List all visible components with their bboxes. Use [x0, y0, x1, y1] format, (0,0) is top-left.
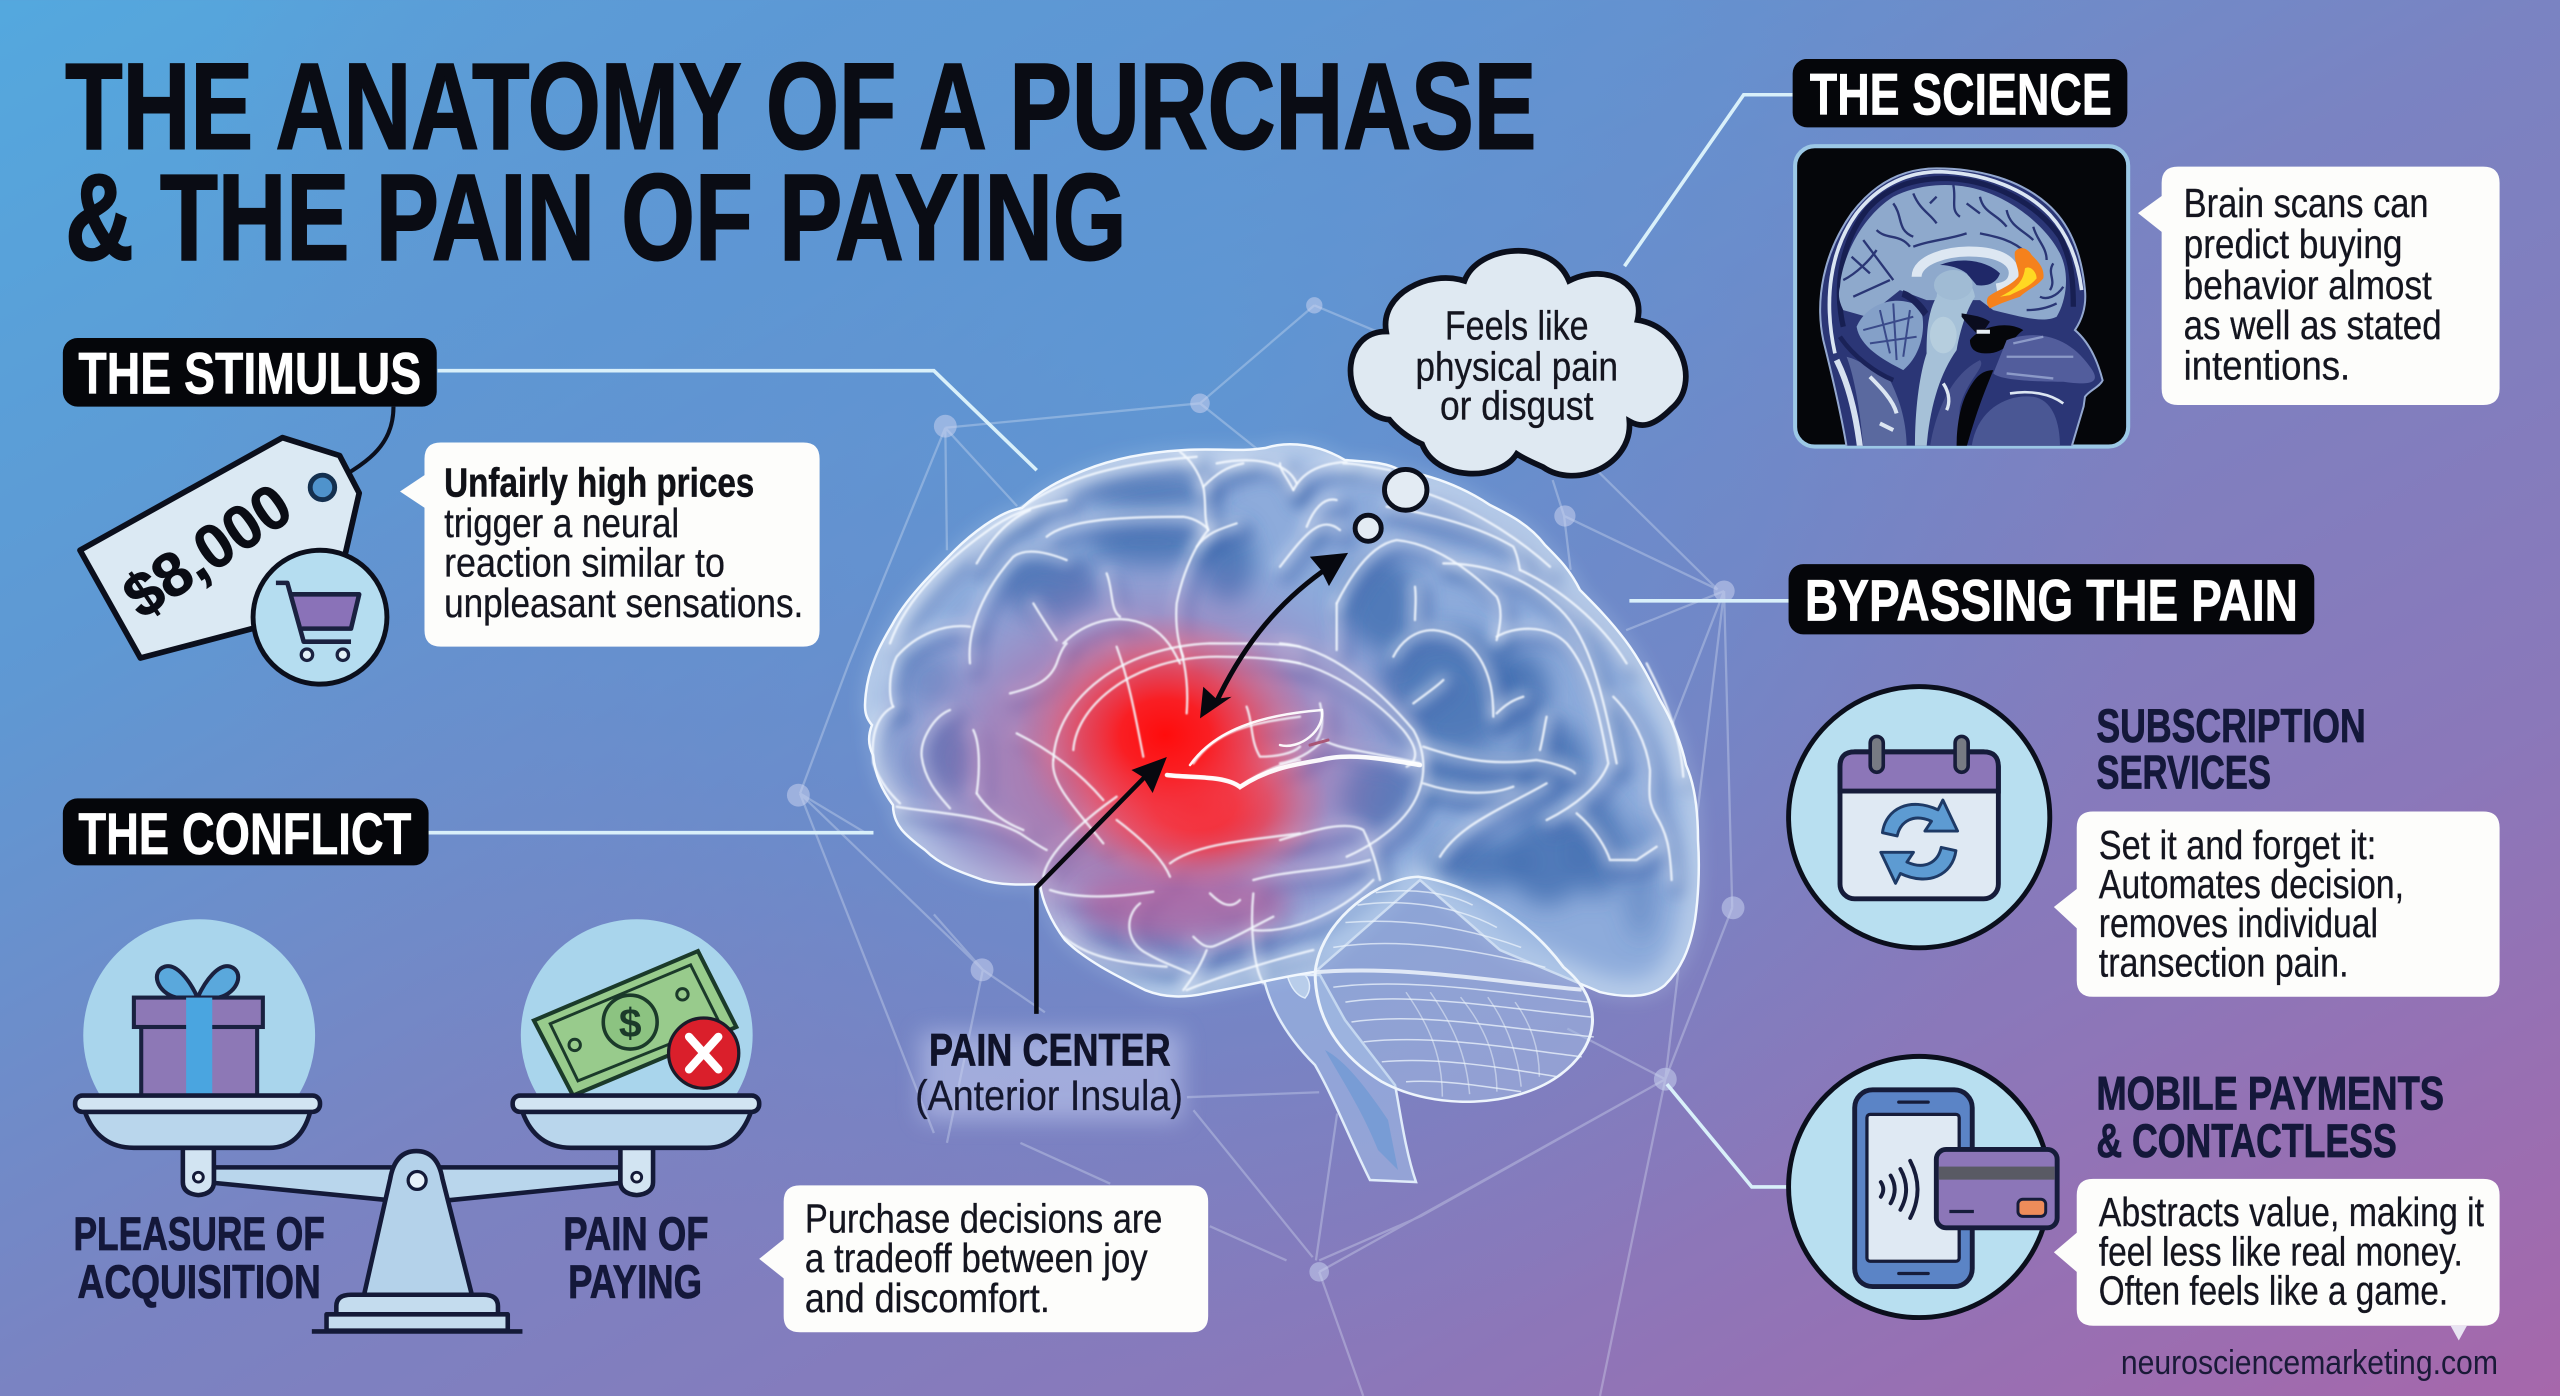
heading: the conflict: THE CONFLICT [78, 802, 412, 867]
connector lines [428, 95, 1793, 1187]
callout: mobile payment text: Often feels like a game. [2099, 1268, 2448, 1314]
callout: subscription text: Automates decision, [2099, 861, 2404, 907]
callout: subscription text: transection pain. [2099, 939, 2349, 985]
label: pleasure of acquisition: PLEASURE OF [73, 1208, 325, 1261]
heading: the stimulus: THE STIMULUS [78, 342, 421, 407]
sylvian fissure highlight [1167, 710, 1420, 787]
footer: source url: neurosciencemarketing.com [2121, 1344, 2498, 1382]
cerebellum [1315, 877, 1594, 1102]
panel: bypassing the pain [1789, 564, 2500, 1340]
brain stem [1263, 975, 1416, 1182]
icon: price tag [80, 407, 393, 658]
icon: money with cross on right pan [520, 919, 753, 1094]
label: pain center [915, 1024, 1183, 1120]
callout: conflict text: and discomfort. [805, 1275, 1050, 1321]
brain outer glow [865, 444, 1699, 996]
icon: subscription calendar [1789, 687, 2050, 948]
callout: conflict text: a tradeoff between joy [805, 1235, 1148, 1281]
image: MRI brain scan [1795, 146, 2128, 447]
icon: phone and contactless card [1789, 1056, 2057, 1318]
callout: stimulus text: Unfairly high prices [444, 459, 754, 505]
sulci shadows and ridge glow [865, 444, 1699, 999]
callout: science text: predict buying [2184, 221, 2402, 267]
icon: balance scale [75, 1096, 759, 1331]
heading: bypassing the pain: BYPASSING THE PAIN [1805, 568, 2298, 633]
title: THE ANATOMY OF A PURCHASE [65, 38, 1536, 175]
callout: science text: intentions. [2184, 343, 2350, 389]
callout: science text: as well as stated [2184, 302, 2442, 348]
icon: money with cross on right pan: $ [619, 1000, 642, 1046]
pain centre glow [889, 570, 1410, 964]
callout: subscription text [2054, 811, 2500, 997]
callout: stimulus text: unpleasant sensations. [444, 580, 803, 626]
callout: stimulus text [400, 442, 820, 647]
title [65, 38, 1536, 286]
label: subscription services [2096, 700, 2366, 800]
thought bubbles [1355, 469, 1427, 541]
callout: subscription text: Set it and forget it: [2099, 822, 2376, 868]
label: mobile payments and contactless [2096, 1067, 2444, 1168]
arrow: pain center pointer [1036, 757, 1167, 1014]
callout: stimulus text: trigger a neural [444, 500, 679, 546]
label: mobile payments and contactless: MOBILE PAYMENTS [2096, 1067, 2444, 1120]
label: pleasure of acquisition: ACQUISITION [78, 1256, 321, 1309]
cerebrum shading [865, 444, 1699, 999]
neural network background [787, 297, 1744, 1396]
label: pain center: PAIN CENTER [929, 1024, 1171, 1075]
cloud text: or disgust [1440, 383, 1594, 429]
icon: shopping cart [253, 550, 387, 684]
cloud text: Feels like [1445, 303, 1589, 349]
gyri highlights [873, 452, 1683, 990]
panel: the conflict [63, 798, 1208, 1332]
cloud text: physical pain [1416, 343, 1618, 389]
central brain illustration [865, 444, 1699, 1182]
callout: mobile payment text [2054, 1179, 2500, 1340]
label: pain of paying: PAIN OF [563, 1208, 709, 1261]
callout: stimulus text: reaction similar to [444, 539, 725, 585]
heading: the science: THE SCIENCE [1810, 62, 2112, 127]
callout: subscription text: removes individual [2099, 900, 2378, 946]
callout: mobile payment text: feel less like real money. [2099, 1228, 2463, 1274]
brain outline [865, 444, 1699, 996]
panel: the science [1793, 59, 2500, 447]
label: pleasure of acquisition [73, 1208, 325, 1309]
panel: the stimulus [63, 338, 820, 684]
label: pain of paying: PAYING [568, 1256, 702, 1309]
cerebrum body [865, 444, 1699, 996]
callout: conflict text: Purchase decisions are [805, 1196, 1162, 1242]
cloud text [1416, 303, 1618, 429]
arrow: double headed pain to cloud [1200, 553, 1348, 718]
thought cloud [1351, 251, 1686, 476]
icon: gift on left pan [83, 919, 316, 1094]
label: subscription services: SUBSCRIPTION [2096, 700, 2366, 753]
callout: science text: behavior almost [2184, 262, 2432, 308]
label: pain of paying [563, 1208, 709, 1309]
title: & THE PAIN OF PAYING [65, 149, 1127, 286]
callout: conflict text [759, 1185, 1208, 1332]
callout: science text: Brain scans can [2184, 180, 2429, 226]
callout: science text [2138, 167, 2500, 405]
callout: thought bubble [1351, 251, 1686, 541]
label: subscription services: SERVICES [2096, 747, 2271, 800]
label: pain center: (Anterior Insula) [915, 1072, 1183, 1119]
label: mobile payments and contactless: & CONTACTLESS [2096, 1115, 2397, 1168]
callout: mobile payment text: Abstracts value, making it [2099, 1189, 2485, 1235]
icon: price tag: $8,000 [111, 471, 304, 632]
